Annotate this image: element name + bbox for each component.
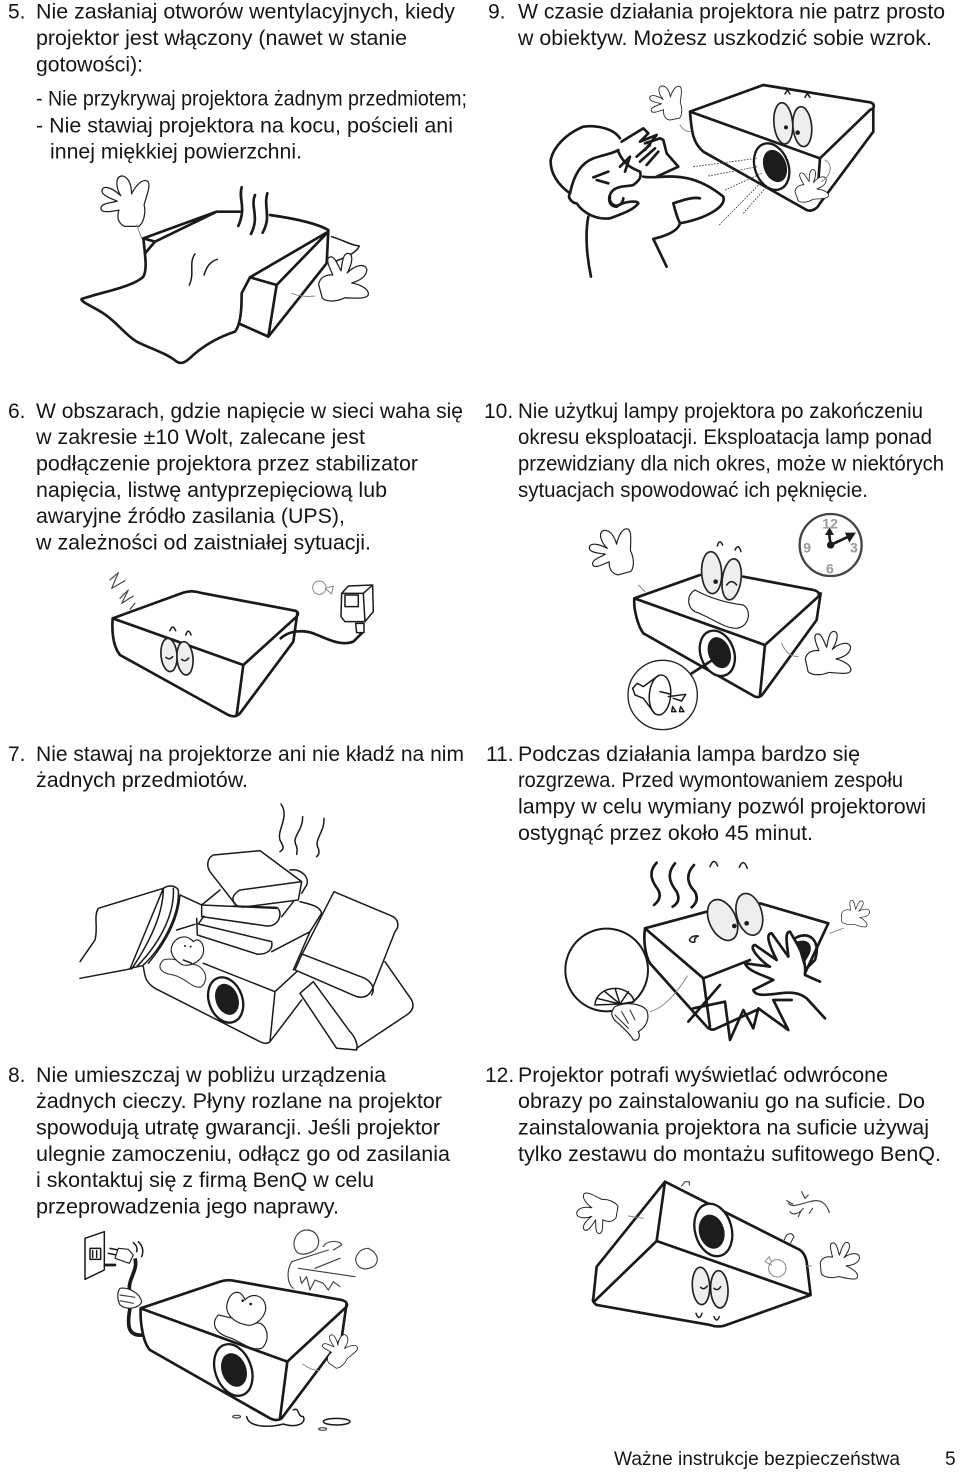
text: item 12: 12. (485, 1064, 514, 1087)
icon: left hand (574, 1192, 643, 1236)
text: item 8: Nie umieszczaj w pobliżu urządzenia (36, 1064, 386, 1087)
text: item 5: projektor jest włączony (nawet w stanie (36, 27, 407, 50)
projector (690, 85, 874, 211)
text: item 8: i skontaktuj się z firmą BenQ w celu (36, 1169, 374, 1192)
footer: Ważne instrukcje bezpieczeństwa (614, 1449, 900, 1470)
mouth (689, 590, 748, 628)
icon: lizard (787, 1192, 829, 1217)
illustration: person shielding eyes from projector (551, 83, 874, 277)
text: item 10: przewidziany dla nich okres, może w niektórych (518, 452, 944, 476)
illustration: ceiling-mounted inverted projector (574, 1182, 861, 1326)
icon: right hand (292, 249, 374, 308)
text: item 12: zainstalowania projektora na suficie używaj (518, 1116, 929, 1140)
icon: large hand (688, 932, 825, 1040)
icon: wall outlet and plug (85, 1232, 143, 1335)
text: item 12: obrazy po zainstalowaniu go na suficie. Do (518, 1090, 925, 1113)
text: item 8: spowodują utratę gwarancji. Jeśli projektor (36, 1116, 440, 1140)
text: item 8: 8. (8, 1064, 26, 1087)
text: item 6: w zakresie ±10 Wolt, zalecane jest (35, 426, 365, 449)
text: item 8: ulegnie zamoczeniu, odłącz go od zasilania (36, 1143, 450, 1166)
text: item 11 (486, 743, 926, 845)
text: item 9: W czasie działania projektora nie patrz prosto (518, 0, 945, 24)
illustration: wet projector with unplugged cord (85, 1230, 377, 1430)
text: item 6 (8, 400, 463, 554)
text: item 6: awaryjne źródło zasilania (UPS), (36, 505, 345, 528)
illustration: worn lamp projector with clock (585, 514, 862, 730)
text: item 12 (485, 1064, 941, 1166)
text: item 8 (8, 1064, 450, 1218)
icon: hand fan (565, 929, 687, 1040)
text: item 5: Nie zasłaniaj otworów wentylacyjnych, kiedy (36, 0, 456, 24)
water puddle (233, 1409, 350, 1430)
stacked blankets (197, 851, 413, 1050)
text: item 10: 10. (484, 400, 513, 423)
text: item 11: ostygnąć przez około 45 minut. (518, 822, 813, 845)
text: item 12: Projektor potrafi wyświetlać odwrócone (518, 1064, 888, 1087)
icon: hand on projector side (790, 160, 832, 207)
icon: clock: 12 (822, 515, 838, 531)
text: item 7: żadnych przedmiotów. (36, 769, 248, 792)
text: item 8: przeprowadzenia jego naprawy. (36, 1196, 339, 1218)
text: item 5: 5. (8, 0, 26, 24)
illustration: sleeping projector with power adapter (110, 573, 373, 716)
icon: clock: 6 (826, 560, 834, 576)
text: item 10 (484, 400, 944, 502)
illustration: projector under pile of objects (80, 804, 413, 1050)
text: item 8: żadnych cieczy. Płyny rozlane na projektor (36, 1090, 442, 1113)
text: item 5: - Nie przykrywaj projektora żadnym przedmiotem; (36, 88, 467, 110)
icon: left hand (101, 176, 149, 238)
text: item 11: Podczas działania lampa bardzo się (518, 743, 860, 766)
person (551, 126, 767, 277)
text: item 11: lampy w celu wymiany pozwól projektorowi (518, 796, 926, 818)
text: item 6: podłączenie projektora przez stabilizator (36, 452, 418, 476)
icon: hands (585, 524, 856, 681)
text: item 6: napięcia, listwę antyprzepięciową lub (36, 479, 387, 502)
text: item 5 (8, 0, 467, 164)
icon: clock: 3 (850, 540, 858, 556)
heat waves (651, 863, 697, 907)
text: item 11: 11. (486, 743, 514, 766)
icon: lamp magnifier (628, 658, 715, 730)
text: item 5: innej miękkiej powierzchni. (50, 140, 302, 164)
icon: hand on projector top (647, 83, 690, 132)
illustration: projector covered with blanket (82, 176, 374, 363)
text: item 6: 6. (8, 400, 26, 423)
icon: right hand (807, 1241, 861, 1282)
text: item 6: W obszarach, gdzie napięcie w sieci waha się (36, 400, 463, 423)
icon: water source with clouds (288, 1230, 377, 1290)
text: item 5: - Nie stawiaj projektora na kocu, pościeli ani (36, 114, 453, 138)
text: item 5: gotowości): (36, 54, 143, 76)
arm with sleeve (80, 886, 202, 978)
illustration: overheated projector with fan (565, 861, 870, 1040)
text: item 7: Nie stawaj na projektorze ani nie kładź na nim (36, 743, 464, 766)
text: item 9 (488, 0, 945, 50)
icon: right hand (303, 1327, 360, 1372)
text: item 10: Nie użytkuj lampy projektora po zakończeniu (518, 400, 923, 423)
icon: clock: 9 (803, 540, 811, 556)
text: item 11: rozgrzewa. Przed wymontowaniem zespołu (518, 769, 903, 792)
text: item 10: sytuacjach spowodować ich pęknięcie. (518, 479, 868, 502)
footer: 5 (945, 1449, 956, 1470)
icon: clock (800, 514, 862, 576)
text: item 12: tylko zestawu do montażu sufitowego BenQ. (518, 1143, 941, 1166)
text: item 10: okresu eksploatacji. Eksploatacja lamp ponad (518, 426, 932, 449)
text: item 7: 7. (8, 743, 26, 766)
text: item 7 (8, 743, 464, 792)
text: item 9: w obiektyw. Możesz uszkodzić sobie wzrok. (517, 27, 932, 50)
heat waves (279, 804, 324, 857)
text: item 6: w zależności od zaistniałej sytuacji. (35, 532, 371, 554)
text: item 9: 9. (488, 0, 506, 24)
icon: power cord and adapter (281, 581, 373, 643)
